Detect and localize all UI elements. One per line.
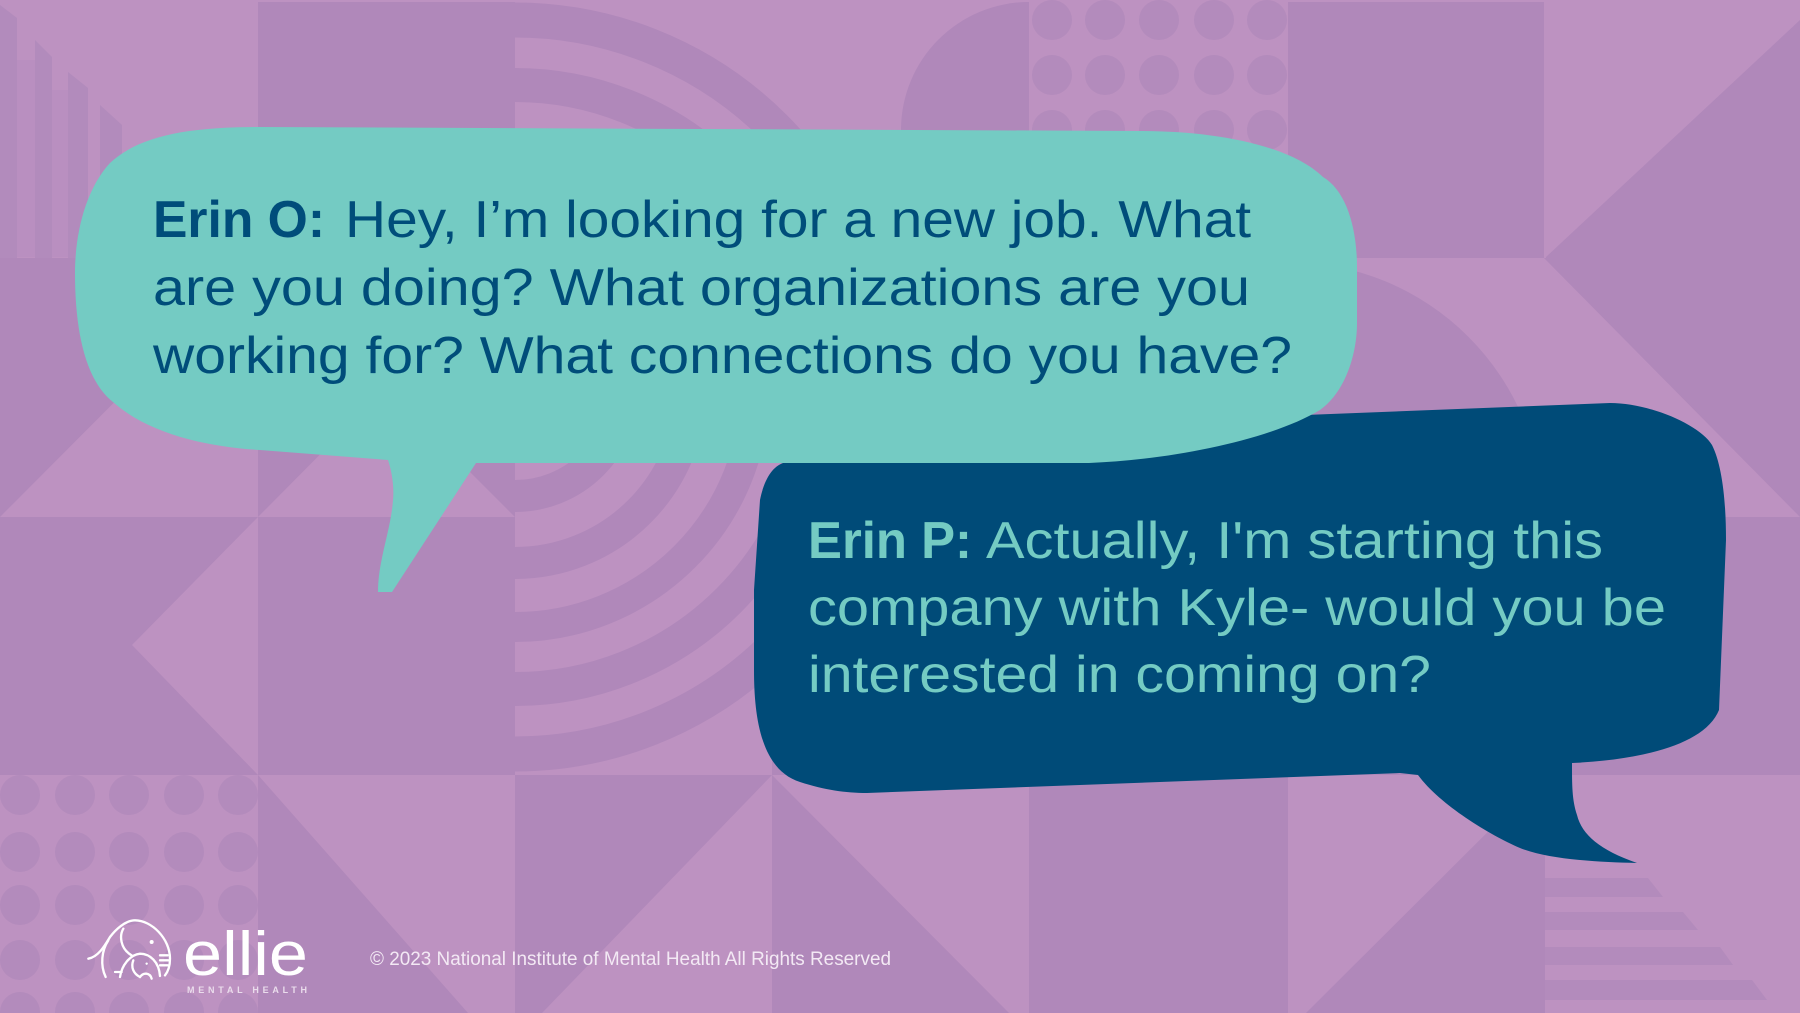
text: Erin O line 2: are you doing? What organizations are you	[153, 259, 1250, 317]
text: Erin P line 2: company with Kyle- would you be	[808, 579, 1666, 637]
tile row 2: triangles, quarter circle	[0, 258, 1800, 517]
concentric rings	[515, 2, 800, 772]
text: Erin O name: Erin O:	[153, 191, 325, 249]
text: Erin O line 1: Hey, I’m looking for a new job. What	[345, 191, 1252, 249]
text: Erin O line 3: working for? What connections do you have?	[152, 327, 1292, 385]
text: Erin P line 3: interested in coming on?	[808, 646, 1431, 704]
logo wordmark: ellie	[183, 920, 308, 989]
bubble shape: navy	[754, 403, 1726, 863]
tile row 1: stripes, solid, semicircle, dots, solid, triangle	[0, 5, 122, 258]
tile row 3: triangle, solid, solid	[0, 517, 1800, 775]
icon: elephant and calf	[88, 920, 170, 979]
speech bubble: Erin P	[754, 403, 1726, 863]
speech bubble: Erin O	[75, 127, 1357, 592]
text: Erin P line 1: Actually, I'm starting this	[986, 512, 1603, 570]
text: Erin P name: Erin P:	[808, 512, 972, 570]
logo: ellie mental health	[88, 920, 308, 995]
tile row 4: dots, triangles, stripes	[258, 775, 1545, 1013]
bubble shape: teal	[75, 127, 1357, 592]
logo tagline: MENTAL HEALTH	[187, 985, 307, 995]
copyright notice: © 2023 National Institute of Mental Health All Rights Reserved	[370, 949, 891, 970]
